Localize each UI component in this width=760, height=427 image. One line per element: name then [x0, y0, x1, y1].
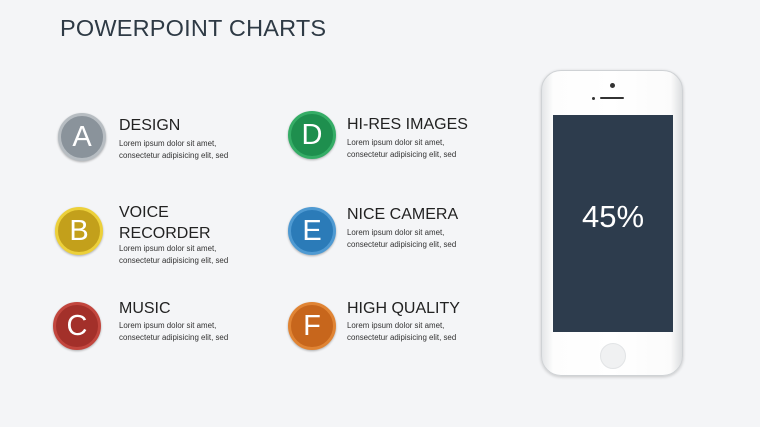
item: C music: C: [67, 310, 87, 342]
item: A design: DESIGN: [119, 117, 180, 134]
item: B voice recorder: VOICE: [119, 204, 169, 221]
item: B voice recorder: B: [69, 215, 89, 247]
item: D hi-res images: consectetur adipisicing elit, sed: [347, 150, 456, 158]
camera: [610, 83, 615, 88]
item: C music: consectetur adipisicing elit, sed: [119, 332, 228, 342]
item: B voice recorder: Lorem ipsum dolor sit amet,: [119, 244, 216, 253]
item: E nice camera: [286, 206, 458, 258]
item: D hi-res images: [286, 110, 468, 162]
item: A design: [56, 112, 228, 164]
item: D hi-res images: HI-RES IMAGES: [347, 116, 468, 133]
item: B voice recorder: [54, 204, 228, 264]
item: F high quality: consectetur adipisicing elit, sed: [347, 332, 456, 342]
item: F high quality: [286, 300, 460, 352]
home button: [600, 343, 626, 369]
item: A design: consectetur adipisicing elit, sed: [119, 150, 228, 160]
item: E nice camera: E: [302, 215, 322, 247]
item: C music: Lorem ipsum dolor sit amet,: [119, 321, 216, 330]
item: D hi-res images: Lorem ipsum dolor sit amet,: [347, 138, 444, 147]
item: A design: Lorem ipsum dolor sit amet,: [119, 139, 216, 148]
item: C music: MUSIC: [119, 300, 171, 317]
screen: [553, 115, 673, 332]
item: D hi-res images: D: [302, 119, 322, 151]
item: E nice camera: NICE CAMERA: [347, 206, 458, 223]
item: E nice camera: consectetur adipisicing elit, sed: [347, 240, 456, 248]
item: C music: [52, 300, 228, 352]
item: E nice camera: Lorem ipsum dolor sit amet,: [347, 228, 444, 237]
item: F high quality: F: [303, 310, 321, 342]
item: F high quality: HIGH QUALITY: [347, 300, 460, 317]
screen: 45%: [582, 199, 644, 234]
speaker: [600, 97, 624, 99]
phone: [541, 70, 683, 376]
item: F high quality: Lorem ipsum dolor sit amet,: [347, 321, 444, 330]
item: B voice recorder: consectetur adipisicing elit, sed: [119, 256, 228, 264]
item: B voice recorder: RECORDER: [119, 225, 211, 242]
item: A design: A: [72, 121, 92, 153]
title: POWERPOINT CHARTS: [60, 15, 326, 41]
